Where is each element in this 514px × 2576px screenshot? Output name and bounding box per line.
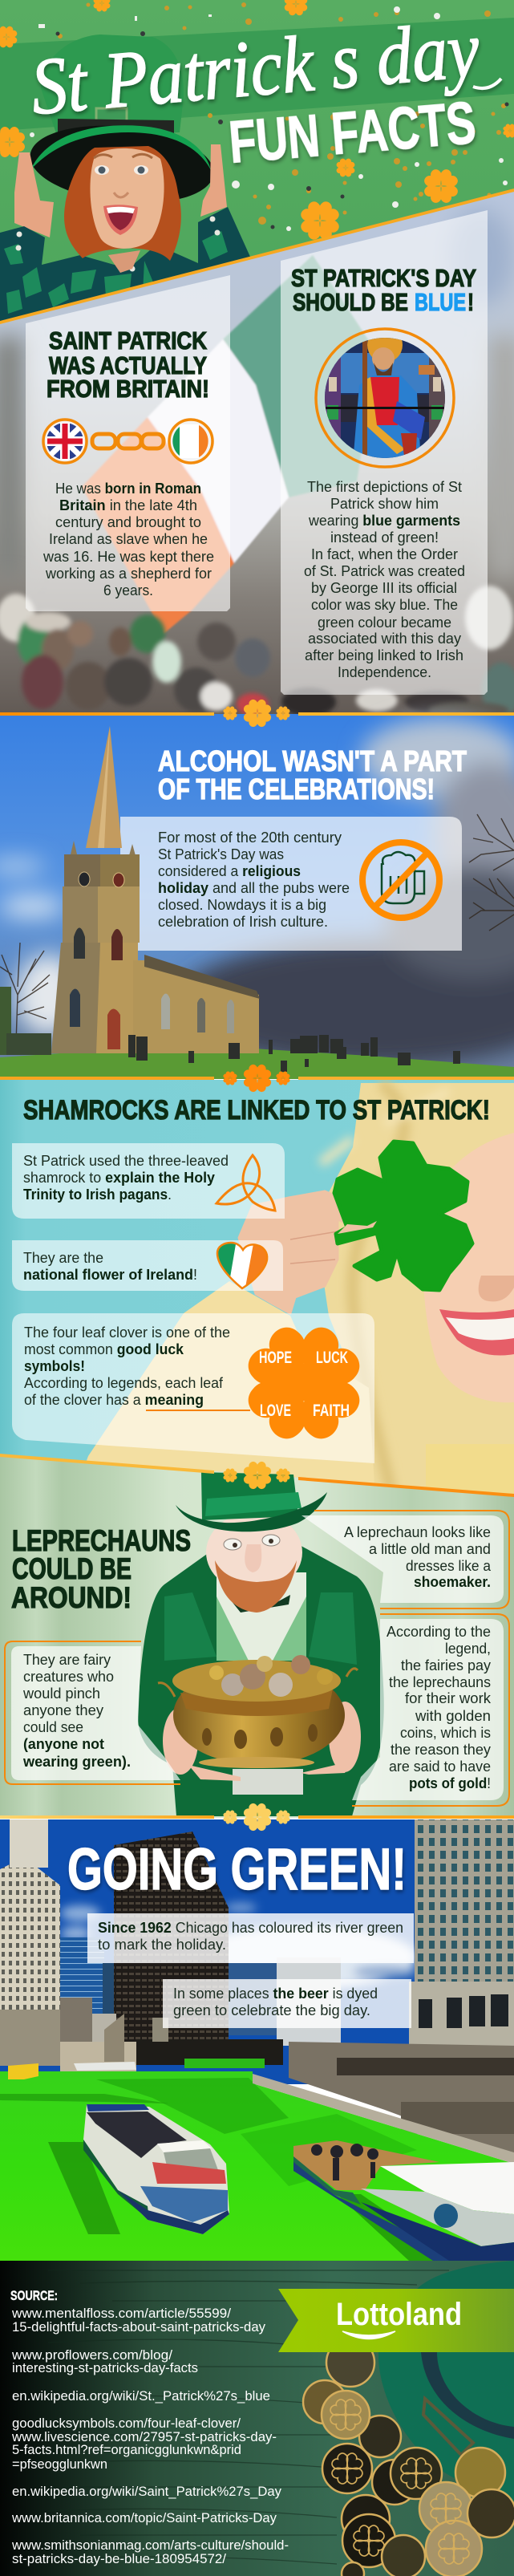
hair <box>64 146 181 261</box>
text: shoemaker. <box>414 1574 491 1590</box>
stone embankment wall <box>253 2074 514 2164</box>
text: most common good luck <box>24 1341 184 1357</box>
logo: Lottoland <box>336 2297 462 2332</box>
panel: pots of gold <box>352 1614 509 1806</box>
text: a little old man and <box>369 1541 491 1557</box>
diagonal line <box>0 189 514 324</box>
text block: holiday and all the pubs were <box>158 880 350 896</box>
panel: four leaf clover <box>12 1313 374 1463</box>
text block: In fact, when the Order <box>311 546 458 562</box>
icon: no beer <box>362 842 439 918</box>
centre tower <box>114 1832 229 2054</box>
text block: For most of the 20th century <box>158 830 342 846</box>
heading <box>158 744 467 805</box>
heading: LEPRECHAUNS <box>12 1524 191 1557</box>
sources: st-patricks-day-be-blue-180954572/ <box>12 2551 226 2566</box>
text: coins, which is <box>400 1725 491 1741</box>
coins <box>172 1655 341 1702</box>
text block: of St. Patrick was created <box>304 563 465 579</box>
embankment buildings <box>289 2042 514 2158</box>
Chicago scene <box>0 1819 514 2261</box>
text <box>23 1153 229 1203</box>
text <box>23 1250 197 1283</box>
sources: en.wikipedia.org/wiki/Saint_Patrick%27s_Day <box>12 2484 281 2499</box>
sources: goodlucksymbols.com/four-leaf-clover/ <box>12 2416 241 2431</box>
white boat <box>74 2062 136 2071</box>
text block: by George III its official <box>311 580 457 596</box>
church <box>51 726 260 1053</box>
text: pots of gold! <box>409 1775 491 1791</box>
text block: wearing blue garments <box>308 513 460 529</box>
section: church and alcohol fact <box>0 714 514 1079</box>
icon: clover with meanings <box>241 1320 366 1446</box>
text: wearing green). <box>22 1754 131 1770</box>
text: legend, <box>445 1641 491 1657</box>
text: The four leaf clover is one of the <box>24 1325 230 1341</box>
text: They are the <box>23 1250 103 1266</box>
text: are said to have <box>389 1759 491 1775</box>
panel: fairy creatures <box>5 1641 180 1784</box>
text <box>173 1986 378 2018</box>
text: for their work <box>405 1690 492 1706</box>
text: to mark the holiday. <box>98 1937 226 1953</box>
text <box>344 1524 492 1590</box>
heading: BLUE <box>415 288 466 316</box>
panel: holy trinity <box>12 1143 285 1219</box>
heading <box>11 1524 191 1614</box>
lips <box>439 1309 514 1356</box>
hands <box>163 1707 198 1775</box>
confetti <box>30 2 508 231</box>
sources: 15-delightful-facts-about-saint-patricks-day <box>12 2319 265 2335</box>
icon: stained glass medallion <box>316 327 454 467</box>
sources: interesting-st-patricks-day-facts <box>12 2360 198 2375</box>
text: In some places the beer is dyed <box>173 1986 378 2002</box>
icon: UK to Ireland chain <box>43 420 212 463</box>
text: the reason they <box>391 1742 491 1758</box>
text: symbols! <box>24 1358 85 1374</box>
text block: considered a religious <box>158 863 301 879</box>
section: leprechauns <box>0 1454 514 1818</box>
shamrock <box>334 1142 472 1290</box>
text: According to the <box>387 1624 491 1640</box>
text block: celebration of Irish culture. <box>158 914 328 930</box>
ribbon: Lottoland <box>278 2289 514 2352</box>
shirt <box>217 1572 306 1661</box>
sources: SOURCE: <box>10 2288 58 2303</box>
text: A leprechaun looks like <box>344 1524 491 1540</box>
panel: shoemaker <box>302 1511 509 1608</box>
text block: Independence. <box>338 664 431 680</box>
text block: St Patrick's Day was <box>158 846 284 862</box>
text: St Patrick used the three-leaved <box>23 1153 229 1169</box>
text: Since 1962 Chicago has coloured its river green <box>98 1920 403 1936</box>
heading: SAINT PATRICK <box>49 327 208 355</box>
hat crown <box>41 34 184 138</box>
jacket <box>138 1544 384 1816</box>
heading: WAS ACTUALLY <box>49 351 207 379</box>
text block: The first depictions of St <box>307 479 462 495</box>
text block: Ireland as slave when he <box>49 531 208 547</box>
text block: green colour became <box>318 615 451 631</box>
text: of the clover has a meaning <box>24 1392 204 1408</box>
text: (anyone not <box>23 1736 104 1752</box>
sources: www.livescience.com/27957-st-patricks-day- <box>11 2429 277 2444</box>
text block: 6 years. <box>103 582 153 598</box>
sources: 5-facts.html?ref=organicgglunkwn&prid <box>12 2442 241 2457</box>
heading: GOING GREEN! <box>67 1837 407 1902</box>
text block <box>304 479 465 680</box>
panel: alcohol text <box>120 817 462 951</box>
head <box>206 1512 302 1592</box>
text block <box>42 481 214 598</box>
heading <box>47 327 209 403</box>
text <box>24 1325 250 1411</box>
yellow water taxi <box>8 2063 38 2079</box>
river <box>0 2071 514 2261</box>
hat <box>201 1472 298 1520</box>
sweater <box>87 1281 374 1481</box>
panel: beer <box>163 1979 411 2028</box>
text: anyone they <box>23 1702 103 1718</box>
sources <box>10 2288 289 2566</box>
woman in leprechaun hat <box>0 34 250 325</box>
left tower <box>0 1857 60 2066</box>
text block <box>158 830 350 930</box>
text block: working as a shepherd for <box>45 566 212 582</box>
text block: associated with this day <box>308 631 461 647</box>
divider: section 3 to 4 <box>0 1063 514 1093</box>
section: going green <box>0 1819 514 2261</box>
panel: should be blue <box>281 210 488 695</box>
section: footer <box>0 2261 514 2576</box>
Irish flag <box>82 255 377 634</box>
boat: tour boat left <box>83 2104 229 2234</box>
text: the fairies pay <box>401 1657 491 1673</box>
sources: www.proflowers.com/blog/ <box>11 2347 172 2363</box>
text block: after being linked to Irish <box>305 647 463 663</box>
sources: =pfseogglunkwn <box>12 2456 107 2472</box>
sources: www.mentalfloss.com/article/55599/ <box>11 2306 231 2321</box>
pot <box>173 1665 345 1765</box>
orange clovers <box>0 0 514 242</box>
sources: www.britannica.com/topic/Saint-Patricks-Day <box>11 2510 277 2525</box>
sources: www.smithsonianmag.com/arts-culture/should- <box>11 2537 289 2553</box>
text block: century and brought to <box>55 514 201 530</box>
sources: en.wikipedia.org/wiki/St._Patrick%27s_blue <box>12 2388 270 2404</box>
title: St Patrick's day <box>32 25 504 119</box>
text: They are fairy <box>23 1652 111 1668</box>
text: national flower of Ireland! <box>23 1267 197 1283</box>
coins <box>303 2339 514 2576</box>
text: with golden <box>415 1708 491 1724</box>
heading: AROUND! <box>11 1581 132 1614</box>
icon: clover with meanings: HOPE <box>259 1349 292 1367</box>
icon: clover with meanings: FAITH <box>313 1402 350 1420</box>
text: According to legends, each leaf <box>24 1375 224 1391</box>
trees <box>0 814 514 1043</box>
hat brim <box>30 125 211 199</box>
woman with shamrock <box>72 1083 514 1500</box>
panel: since 1962 <box>87 1913 414 1963</box>
text block: instead of green! <box>330 529 439 546</box>
divider: section 2 to 3 <box>0 698 514 728</box>
heading <box>291 264 476 316</box>
panel: national flower <box>12 1239 283 1292</box>
text: could see <box>23 1719 83 1735</box>
text block: He was born in Roman <box>55 481 201 497</box>
icon: Irish heart <box>217 1242 268 1290</box>
heading: OF THE CELEBRATIONS! <box>158 773 435 805</box>
icon: clover with meanings: LUCK <box>316 1349 348 1367</box>
text: creatures who <box>23 1669 114 1685</box>
text: the leprechauns <box>389 1674 491 1690</box>
text: dresses like a <box>406 1558 492 1574</box>
face <box>90 148 164 249</box>
crowd <box>0 586 514 718</box>
heading: ST PATRICK'S DAY <box>291 264 476 292</box>
leprechaun with pot of gold <box>138 1472 384 1816</box>
heading: FROM BRITAIN! <box>47 375 209 403</box>
bridge <box>135 2039 283 2065</box>
hands <box>14 152 54 237</box>
text block: Britain in the late 4th <box>59 497 197 513</box>
divider: section 4 to 5 diagonal <box>0 1454 514 1497</box>
text <box>98 1920 403 1953</box>
sky <box>0 714 514 1079</box>
ground <box>0 1048 514 1079</box>
bow tie <box>231 1595 290 1613</box>
gravestones <box>128 1035 460 1072</box>
heading: ! <box>467 288 474 316</box>
hand <box>237 1191 343 1314</box>
text: green to celebrate the big day. <box>173 2002 370 2018</box>
right tower <box>415 1819 514 2028</box>
shirt <box>0 207 250 325</box>
section: hero <box>0 0 514 329</box>
eyes <box>95 165 109 175</box>
text block: was 16. He was kept there <box>42 549 214 565</box>
icon: clover with meanings: LOVE <box>260 1402 291 1420</box>
section: shamrocks <box>0 1080 514 1500</box>
icon: trinity knot <box>217 1155 275 1211</box>
text: Trinity to Irish pagans. <box>23 1187 172 1203</box>
hat <box>378 2261 514 2511</box>
divider: section 5 to 6 <box>0 1802 514 1832</box>
boat: tour boat right <box>293 2140 514 2261</box>
text block: closed. Nowdays it is a big <box>158 897 326 913</box>
text: shamrock to explain the Holy <box>23 1170 215 1186</box>
text <box>22 1652 131 1770</box>
section: crowd and Irish flag background <box>0 185 514 718</box>
text: would pinch <box>22 1686 100 1702</box>
text <box>387 1624 492 1791</box>
text block: color was sky blue. The <box>311 597 458 613</box>
heading: SHOULD BE <box>293 288 408 316</box>
mouth <box>103 205 138 235</box>
heading: COULD BE <box>12 1552 132 1585</box>
text block: Patrick show him <box>330 496 439 512</box>
panel: Saint Patrick was from Britain <box>26 275 230 611</box>
